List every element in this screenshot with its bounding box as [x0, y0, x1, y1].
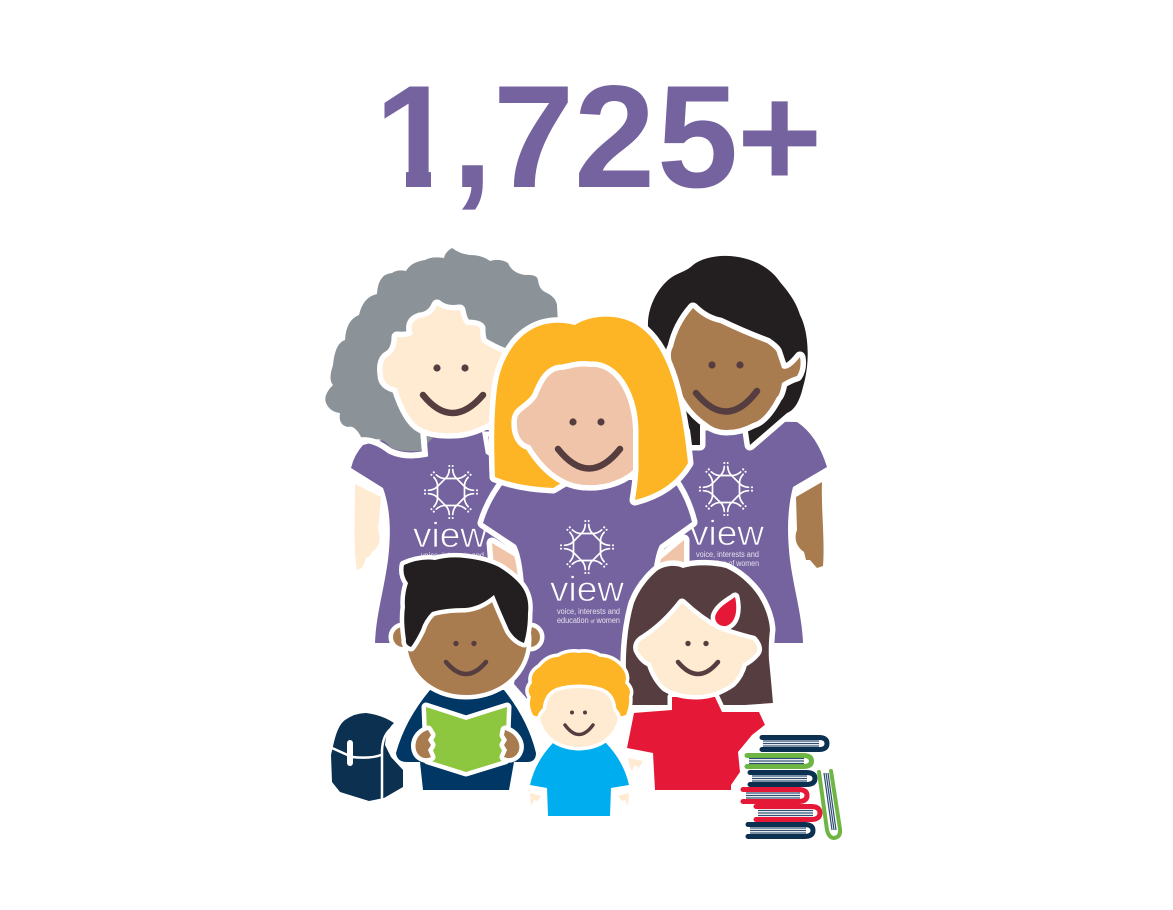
face [517, 366, 633, 485]
bag body [331, 713, 403, 801]
t-shirt [483, 480, 692, 700]
view wordmark: education of women [557, 616, 620, 625]
view wordmark: voice, interests and [421, 551, 484, 560]
eyes [570, 710, 587, 714]
face [382, 305, 520, 433]
view wordmark [550, 570, 625, 625]
red shirt [627, 697, 765, 790]
shirt [530, 743, 629, 816]
eyes [569, 418, 605, 426]
t-shirt [650, 420, 827, 643]
grey hair [325, 248, 558, 451]
book [426, 707, 507, 772]
face [541, 688, 618, 747]
girl [626, 565, 773, 790]
woman with black hair [648, 256, 827, 643]
title: 1,725+: 1,725+ [374, 55, 822, 218]
sweater [396, 690, 536, 790]
view wordmark: view [413, 516, 488, 555]
view wordmark: view [690, 514, 765, 553]
left arm [492, 543, 522, 590]
book 6 [748, 824, 813, 836]
book 5 [756, 806, 820, 820]
hair clip [715, 597, 736, 626]
eyes [685, 641, 709, 646]
logo [560, 520, 614, 574]
smile [558, 449, 620, 468]
hands [530, 793, 629, 806]
woman with blonde hair [483, 317, 692, 700]
neck outline [358, 430, 425, 455]
woman with grey hair [325, 248, 558, 643]
book 4 [743, 790, 807, 802]
logo [424, 465, 478, 519]
smile [678, 662, 718, 674]
smile [565, 725, 593, 734]
eyes [708, 361, 744, 369]
smile [423, 395, 483, 413]
view wordmark: view [550, 570, 625, 609]
ears [393, 627, 540, 647]
head [407, 580, 527, 695]
leaning green book [819, 771, 840, 838]
right arm [655, 540, 684, 590]
book 3 [750, 772, 815, 784]
book 1 [762, 738, 827, 750]
orange curly hair [529, 652, 630, 716]
smile [696, 391, 757, 412]
hair [404, 557, 528, 647]
grey hair sliver [485, 434, 497, 458]
face [638, 603, 757, 695]
small boy [529, 652, 630, 816]
backpack [331, 713, 403, 801]
arm [354, 484, 381, 570]
blonde hair [494, 317, 688, 500]
arm [796, 482, 824, 568]
stack of books [731, 722, 850, 842]
boy with book [393, 557, 540, 790]
white halo [731, 722, 850, 842]
black hair [648, 256, 808, 445]
t-shirt [351, 430, 520, 643]
eyes [453, 641, 477, 646]
flap and strap [332, 728, 392, 800]
left hand [628, 758, 643, 771]
hands [416, 730, 519, 758]
view wordmark [690, 514, 765, 568]
smile [446, 662, 486, 674]
brown hair [626, 565, 773, 705]
buckle [347, 743, 353, 763]
view wordmark: education of women [696, 559, 759, 568]
eyes [433, 364, 469, 372]
book 2 [747, 756, 812, 766]
view wordmark: voice, interests and [696, 550, 759, 559]
face [671, 308, 801, 430]
logo [699, 462, 753, 516]
view wordmark: voice, interests and [557, 607, 620, 616]
